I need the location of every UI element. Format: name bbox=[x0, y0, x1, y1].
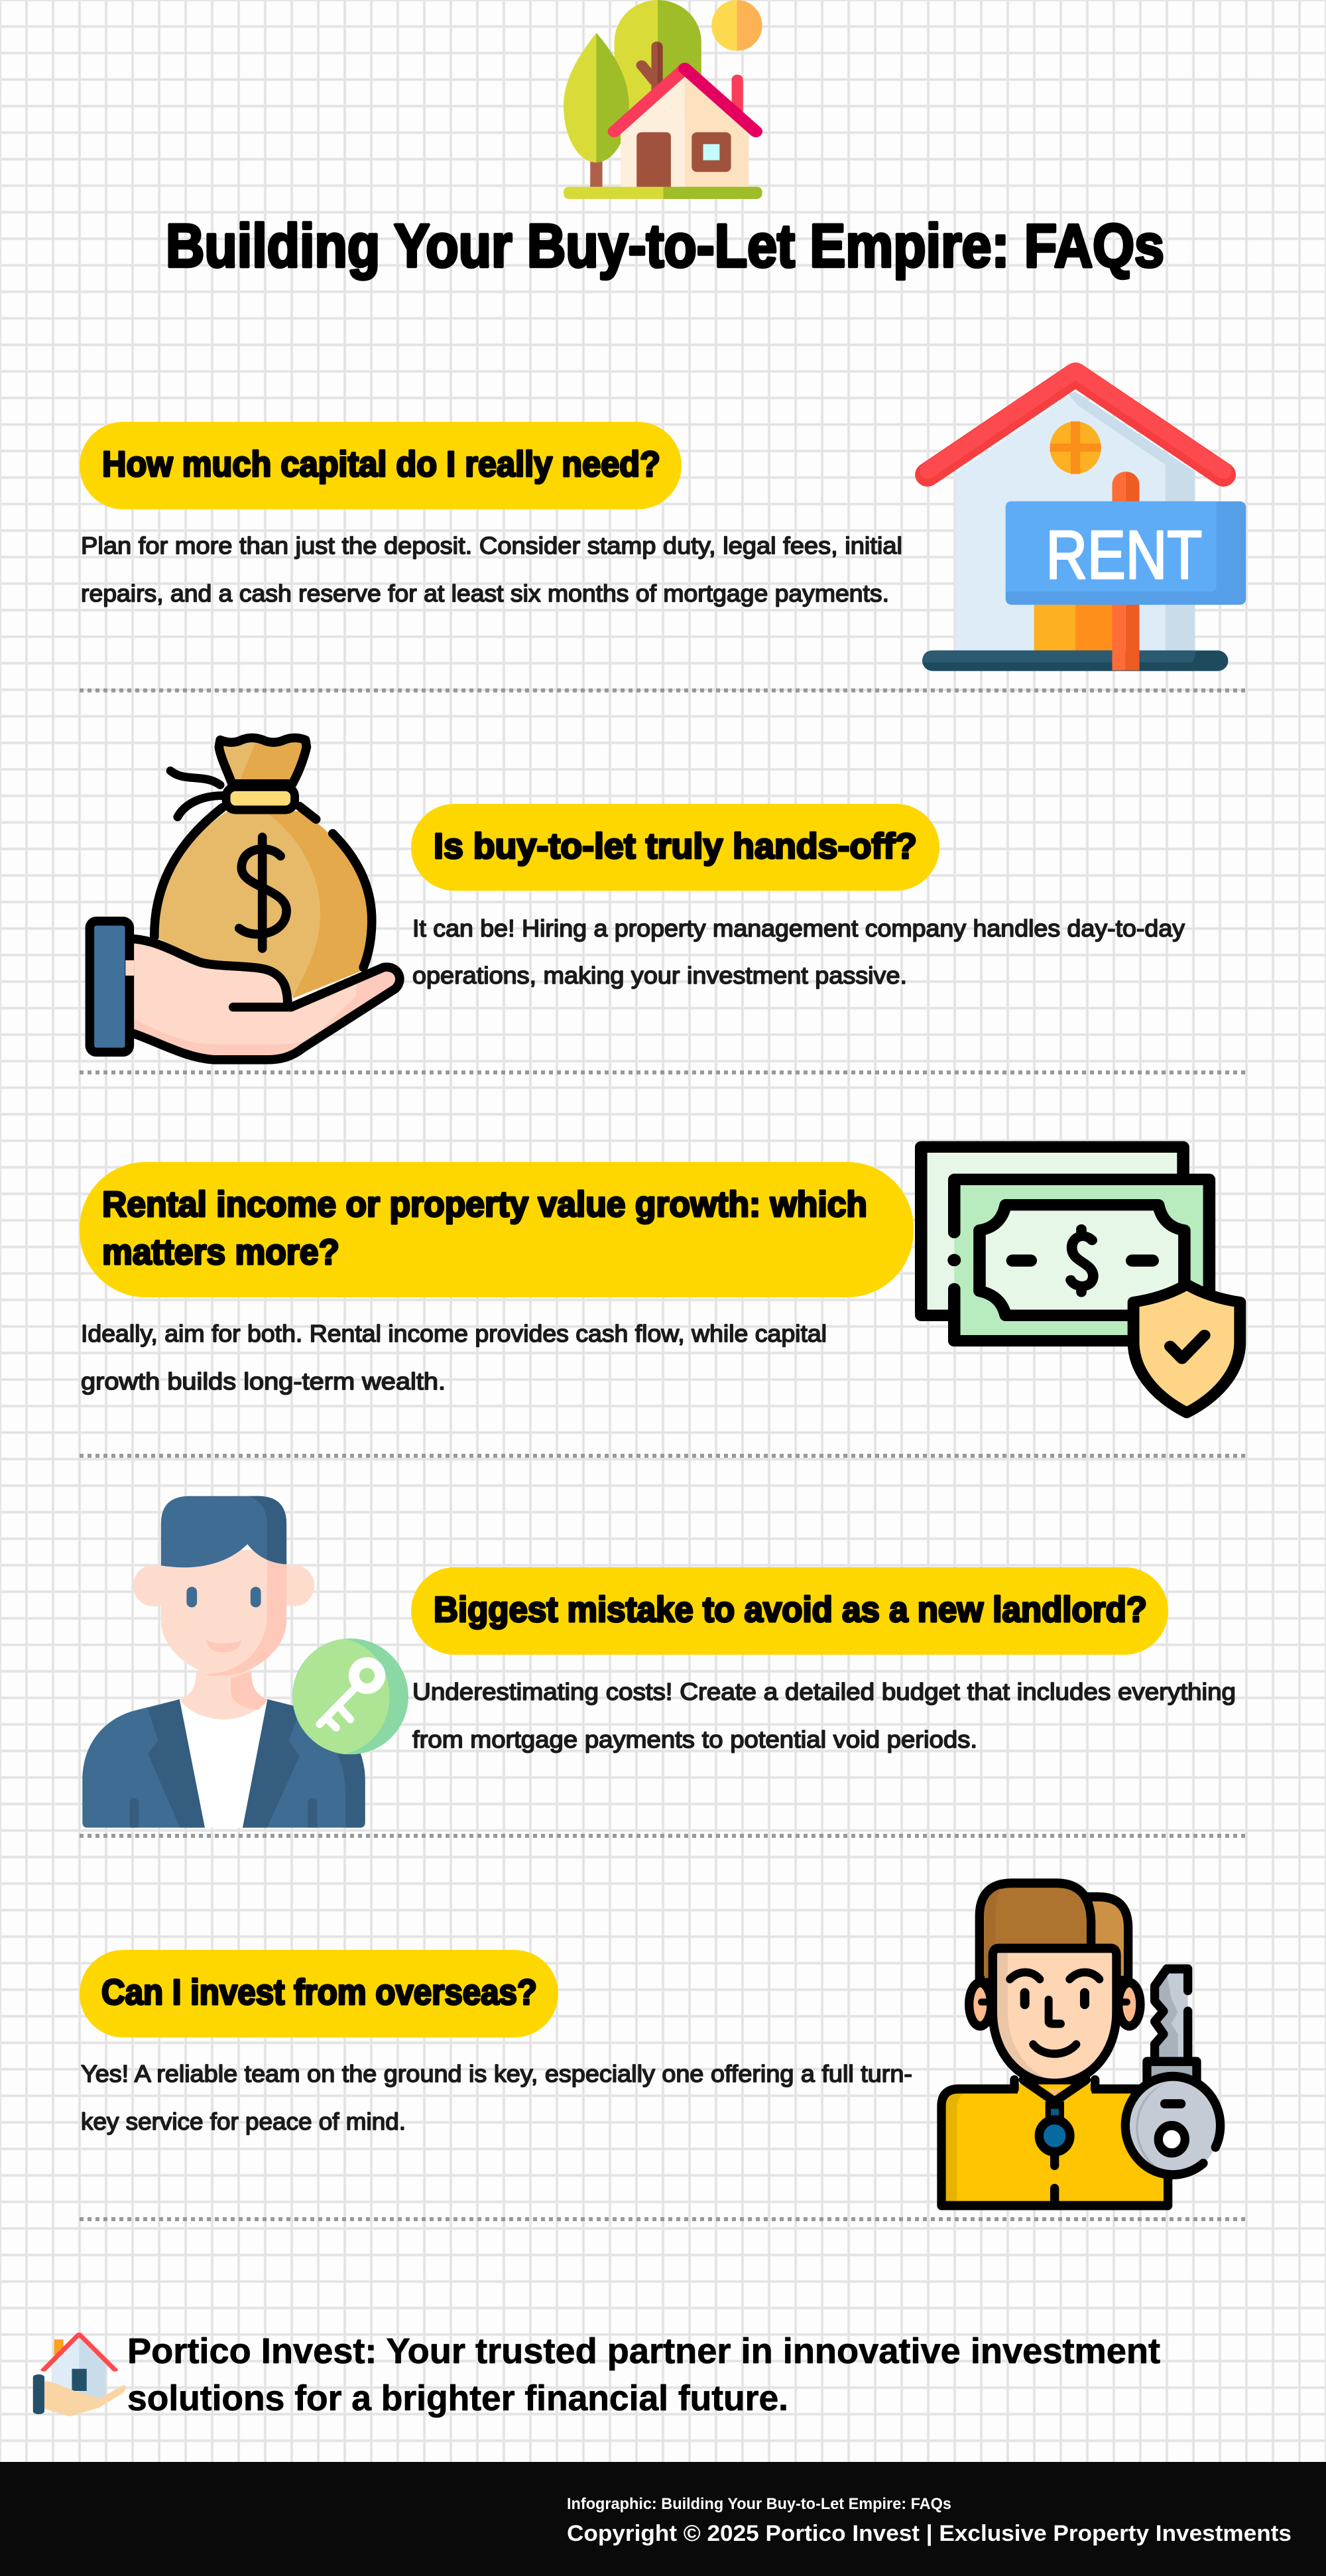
answer text: overseas bbox=[81, 2060, 912, 2135]
answer text: capital: repairs, and a cash reserve for at least six months of mortgage payments. bbox=[81, 580, 889, 607]
icon: banknotes with shield bbox=[921, 1147, 1240, 1413]
icon: house with trees and sun bbox=[564, 0, 762, 199]
answer text: capital bbox=[81, 532, 902, 607]
question pill: income or growth: matters more? bbox=[102, 1232, 339, 1272]
answer text: income or growth: growth builds long-term wealth. bbox=[81, 1368, 446, 1395]
question pill: hands-off: Is buy-to-let truly hands-off? bbox=[434, 826, 917, 866]
tagline text: Portico Invest: Your trusted partner in innovative investment bbox=[127, 2331, 1160, 2371]
icon: money bag on hand bbox=[90, 738, 400, 1060]
panel: capital bbox=[80, 371, 1246, 671]
tagline text bbox=[127, 2331, 1160, 2418]
answer text: capital: Plan for more than just the deposit. Consider stamp duty, legal fees, initial bbox=[81, 532, 902, 559]
question pill: income or growth bbox=[80, 1162, 914, 1297]
answer text: hands-off: operations, making your investment passive. bbox=[412, 962, 907, 989]
question pill: income or growth: Rental income or property value growth: which bbox=[102, 1185, 867, 1224]
answer text: hands-off bbox=[412, 915, 1185, 989]
icon: landlord with key badge bbox=[82, 1496, 408, 1828]
answer text: income or growth bbox=[81, 1320, 827, 1395]
answer text: income or growth: Ideally, aim for both. Rental income provides cash flow, while capital bbox=[81, 1320, 827, 1347]
icon: agent holding key bbox=[941, 1883, 1221, 2205]
title: Building Your Buy-to-Let Empire: FAQs bbox=[166, 212, 1164, 280]
answer text: hands-off: It can be! Hiring a property management company handles day-to-day bbox=[412, 915, 1185, 942]
question pill: overseas bbox=[80, 1950, 558, 2037]
closing statement bbox=[33, 2331, 1160, 2418]
answer text: biggest mistake: from mortgage payments to potential void periods. bbox=[412, 1726, 977, 1753]
icon: house with rent sign bbox=[922, 371, 1246, 671]
question pill: biggest mistake bbox=[411, 1567, 1168, 1655]
panel: hands-off bbox=[90, 738, 1185, 1060]
question pill: capital: How much capital do I really need? bbox=[102, 444, 660, 484]
footer bbox=[0, 2462, 1326, 2576]
sign label: RENT bbox=[1046, 517, 1202, 594]
tagline text: solutions for a brighter financial future. bbox=[127, 2378, 788, 2418]
panel: biggest mistake bbox=[82, 1496, 1236, 1828]
icon: house in hand bbox=[33, 2334, 126, 2416]
question pill: biggest mistake: Biggest mistake to avoid as a new landlord? bbox=[434, 1590, 1147, 1630]
question pill: hands-off bbox=[411, 804, 939, 891]
panel: invest from overseas bbox=[80, 1883, 1221, 2205]
question pill: capital bbox=[80, 422, 682, 509]
panel: income or growth bbox=[80, 1147, 1240, 1413]
copyright line: Copyright © 2025 Portico Invest | Exclusive Property Investments bbox=[567, 2521, 1292, 2546]
answer text: biggest mistake bbox=[412, 1678, 1236, 1753]
answer text: overseas: key service for peace of mind. bbox=[81, 2108, 406, 2135]
answer text: overseas: Yes! A reliable team on the ground is key, especially one offering a full turn- bbox=[81, 2060, 912, 2087]
answer text: biggest mistake: Underestimating costs! Create a detailed budget that includes everything bbox=[412, 1678, 1236, 1705]
question pill: overseas: Can I invest from overseas? bbox=[101, 1972, 537, 2012]
footer caption: Infographic: Building Your Buy-to-Let Empire: FAQs bbox=[567, 2495, 951, 2513]
